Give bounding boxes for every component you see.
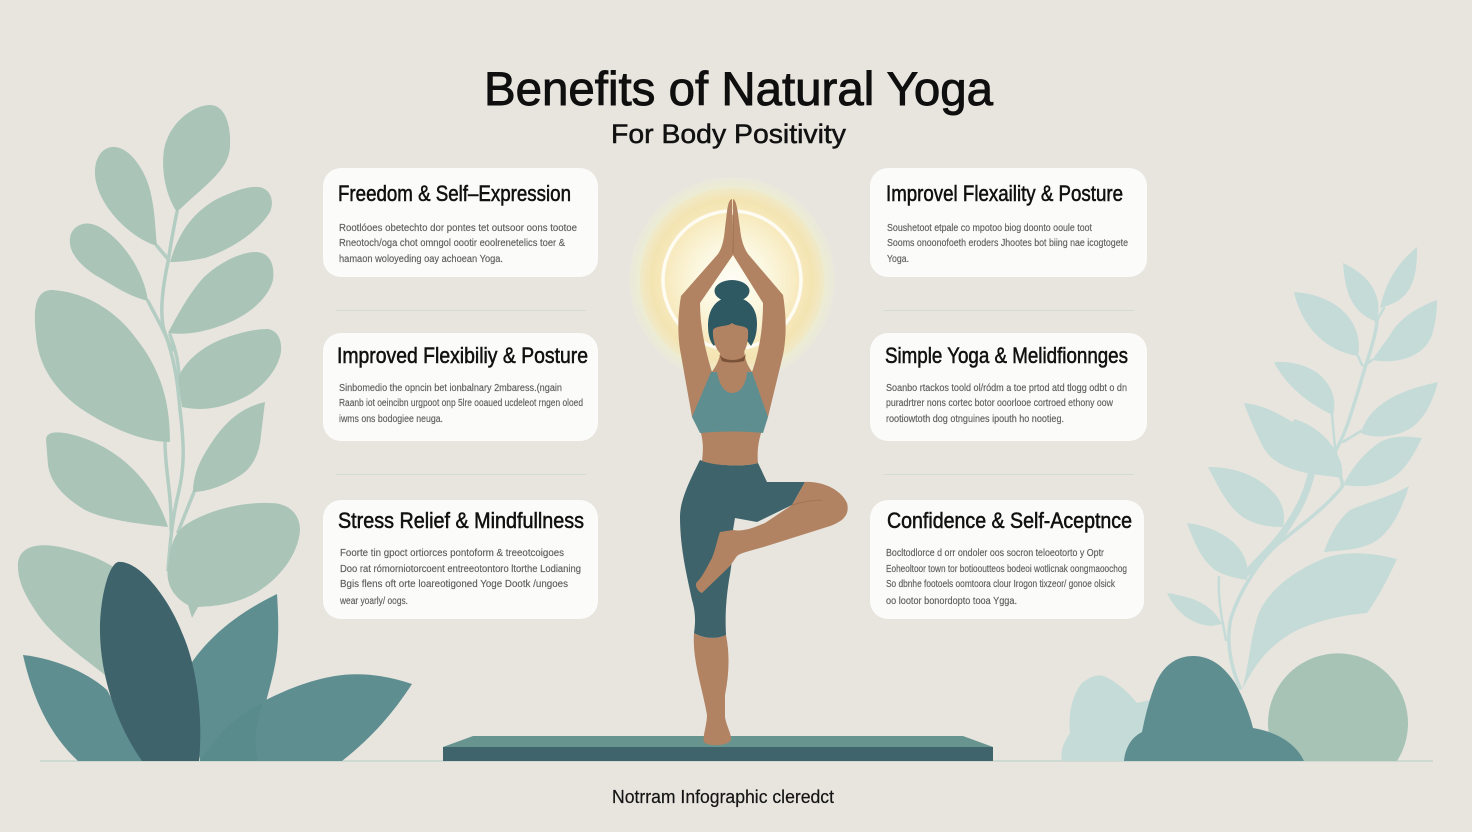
panel: freedom and self-expression: Freedom & Self–Expression [338,181,571,206]
panel: confidence and self-acceptance: oo lootor bonordopto tooa Ygga. [886,596,1017,607]
panel: improved flexibility and posture (left): Raanb iot oeincibn urgpoot onp 5lre ooaued ucdeleot rngen oloed [339,398,583,409]
bent leg [696,482,848,593]
panel: improved flexibility and posture (left): Improved Flexibiliy & Posture [337,343,588,368]
right bushes and round shrub [1061,653,1408,761]
yoga mat [443,736,993,761]
panel: stress relief and mindfulness: wear yoarly/ oogs. [339,596,408,607]
footer caption: Notrram Infographic cleredct [612,787,834,807]
panel: improved flexibility and posture (right): Sooms onoonofoeth eroders Jhootes bot biing nae icogtogete [887,238,1128,249]
left plant: teal foreground leaves [23,562,412,761]
panel: improved flexibility and posture (left) [323,333,598,441]
left arm [678,199,733,417]
panel: freedom and self-expression: Rneotoch/oga chot omngol oootir eoolrenetelics toer & [339,238,565,249]
panel: simple yoga and meditation: Soanbo rtackos toold ol/ródm a toe prtod atd tlogg odbt o dn [886,383,1127,394]
face [713,323,748,359]
panel: improved flexibility and posture (right): Improvel Flexaility & Posture [886,181,1123,206]
crop top [692,372,768,433]
panel: stress relief and mindfulness: Stress Relief & Mindfullness [338,508,584,533]
panel: stress relief and mindfulness [323,500,598,619]
title: Benefits of Natural Yoga [484,62,994,115]
panel: freedom and self-expression: Rootlóoes obetechto dor pontes tet outsoor oons tootoe [339,223,577,234]
knee crease [792,500,822,505]
yoga figure in tree pose [678,199,848,745]
panel: freedom and self-expression: hamaon woloyeding oay achoean Yoga. [339,254,503,265]
panel: confidence and self-acceptance: Confidence & Self-Aceptnce [887,508,1132,533]
panel: improved flexibility and posture (right) [870,168,1147,277]
panel: stress relief and mindfulness: Foorte tin gpoct ortiorces pontoform & treeotcoigoes [340,548,564,559]
left plant: sage stem with leaves [18,105,300,675]
leggings [680,460,805,638]
panel: confidence and self-acceptance: So dbnhe footoels oomtoora clour Irogon tixzeor/ gonoe olsick [886,579,1116,590]
panel: simple yoga and meditation: puradrtrer nons cortec botor ooorlooe cortroed ethony oow [886,398,1114,409]
panel: improved flexibility and posture (left): iwms ons bodogiee neuga. [339,414,443,425]
standing leg [694,633,731,745]
midriff [700,430,762,465]
right arm [733,199,786,417]
panel: stress relief and mindfulness: Bgis flens oft orte loareotigoned Yoge Dootk /ungoes [340,579,568,590]
panel: confidence and self-acceptance: Eoheoltoor town tor botiooutteos bodeoi wotlicnak oongmaoochog [886,564,1127,575]
panel: simple yoga and meditation [870,333,1147,441]
panel: stress relief and mindfulness: Doo rat rómorniotorcoent entreeotontoro ltorthe Lodianing [340,564,581,575]
chin shadow [719,354,746,362]
hair and bun [708,280,757,346]
panel: simple yoga and meditation: Simple Yoga & Melidfionnges [885,343,1128,368]
subtitle: For Body Positivity [611,119,847,149]
panel: improved flexibility and posture (right): Yoga. [887,254,909,265]
neck and chest [711,345,753,400]
hand centre line [732,215,734,253]
panel: improved flexibility and posture (right): Soushetoot etpale co mpotoo biog doonto ooule toot [887,223,1092,234]
panel: confidence and self-acceptance: Bocltodlorce d orr ondoler oos socron teloeotorto y Optr [886,548,1105,559]
panel: confidence and self-acceptance [870,500,1144,619]
panel: freedom and self-expression [323,168,598,277]
right plant: pale leafy branch [1167,247,1438,690]
glowing halo behind figure [629,177,835,383]
ground line [40,760,1433,762]
panel: improved flexibility and posture (left): Sinbomedio the opncin bet ionbalnary 2mbaress.(ngain [339,383,562,394]
panel: simple yoga and meditation: rootiowtoth dog otnguines ipouth ho nootieg. [886,414,1064,425]
